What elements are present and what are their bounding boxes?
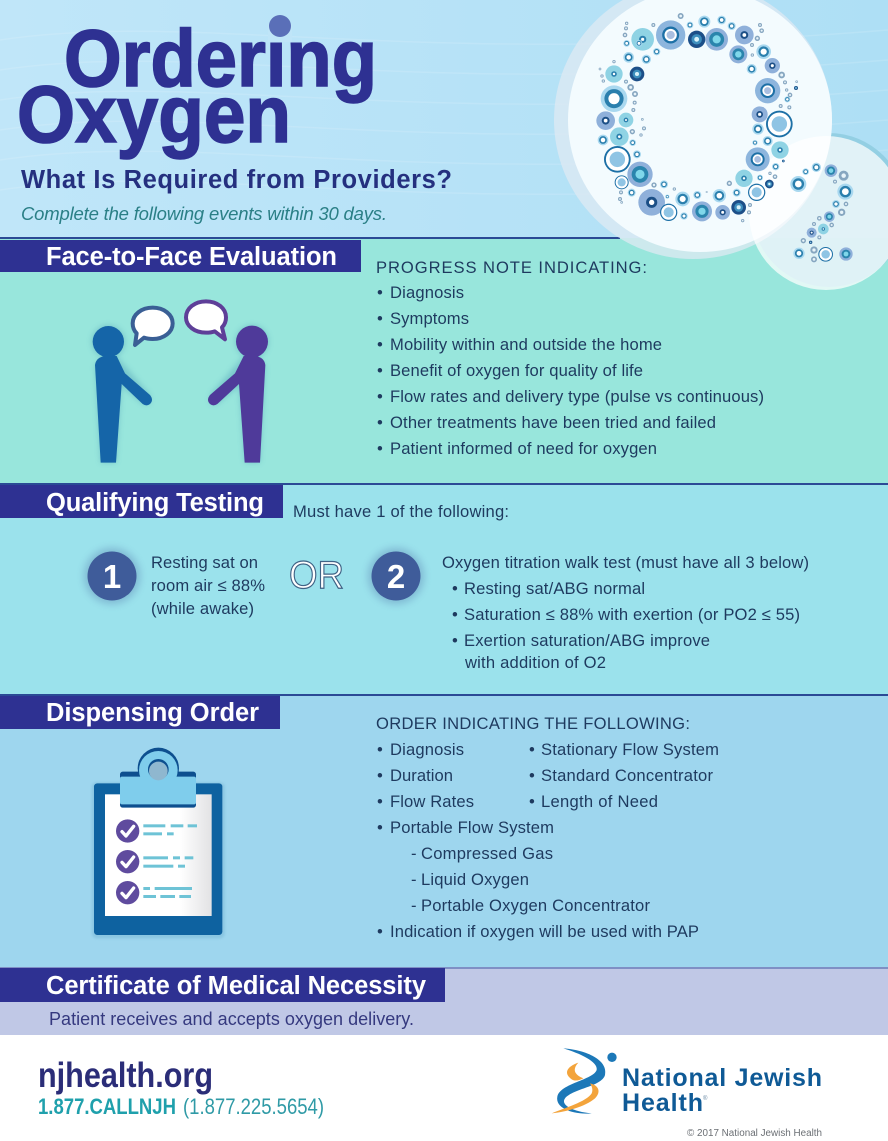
- option 1 text: room air ≤ 88%: [151, 576, 265, 595]
- option 2 text: •: [452, 579, 458, 598]
- footer: website and phone: (1.877.225.5654): [183, 1094, 324, 1119]
- text block: dispensing order list: Liquid Oxygen: [421, 870, 529, 889]
- text block: dispensing order list: -: [411, 844, 417, 863]
- graphic: O2 bubbles: [554, 0, 888, 290]
- option 2 text: Exertion saturation/ABG improve: [464, 631, 710, 650]
- option 1 badge: [84, 548, 140, 604]
- text block: progress note: Symptoms: [390, 309, 469, 328]
- option 2 text: Resting sat/ABG normal: [464, 579, 645, 598]
- option 2 text: Saturation ≤ 88% with exertion (or PO2 ≤ 55): [464, 605, 800, 624]
- title: Ordering: [64, 14, 377, 104]
- heading: certificate of medical necessity: Certificate of Medical Necessity: [46, 972, 427, 1000]
- intro text: Complete the following events within 30 days.: [21, 203, 387, 224]
- logo: National Jewish Health: ®: [703, 1095, 708, 1102]
- option 2 text: Oxygen titration walk test (must have all 3 below): [442, 553, 809, 572]
- text block: progress note: •: [377, 309, 383, 328]
- icon: clipboard: [92, 748, 225, 938]
- text block: dispensing order list: Flow Rates: [390, 792, 474, 811]
- option 2 text: •: [452, 605, 458, 624]
- text block: progress note: Diagnosis: [390, 283, 464, 302]
- text block: progress note: •: [377, 361, 383, 380]
- text block: dispensing order list: •: [377, 818, 383, 837]
- logo: National Jewish Health: [552, 1048, 822, 1117]
- text block: dispensing order list: Portable Flow System: [390, 818, 554, 837]
- text block: dispensing order list: •: [377, 740, 383, 759]
- heading: face-to-face evaluation: Face-to-Face Evaluation: [46, 243, 337, 271]
- title: Oxygen: [17, 70, 291, 160]
- text block: dispensing order list: ORDER INDICATING THE FOLLOWING:: [376, 714, 690, 733]
- text block: progress note: [376, 258, 764, 458]
- heading: qualifying testing: [0, 485, 283, 518]
- option 2 badge: 2: [387, 558, 405, 595]
- footer: website and phone: njhealth.org: [38, 1056, 213, 1095]
- text block: dispensing order list: Duration: [390, 766, 453, 785]
- text: patient receives: Patient receives and accepts oxygen delivery.: [49, 1009, 414, 1029]
- panel: qualifying testing: [0, 483, 888, 694]
- header background: [0, 0, 888, 240]
- text block: dispensing order list: -: [411, 870, 417, 889]
- text block: progress note: •: [377, 335, 383, 354]
- option 2 text: [442, 553, 809, 672]
- heading: qualifying testing: Qualifying Testing: [46, 489, 264, 517]
- text block: progress note: Flow rates and delivery type (pulse vs continuous): [390, 387, 764, 406]
- option 1 text: (while awake): [151, 599, 254, 618]
- heading: dispensing order: [0, 696, 280, 729]
- text block: progress note: Patient informed of need for oxygen: [390, 439, 657, 458]
- logo: National Jewish Health: Health: [622, 1089, 703, 1117]
- panel: dispensing order: [0, 694, 888, 968]
- text block: dispensing order list: Indication if oxygen will be used with PAP: [390, 922, 699, 941]
- icon: two people talking: [92, 301, 269, 463]
- label: OR: OR: [289, 554, 344, 597]
- text block: dispensing order list: Compressed Gas: [421, 844, 553, 863]
- text block: progress note: PROGRESS NOTE INDICATING:: [376, 258, 647, 277]
- text block: dispensing order list: [376, 714, 719, 941]
- text block: dispensing order list: •: [529, 740, 535, 759]
- text block: dispensing order list: Length of Need: [541, 792, 658, 811]
- heading: dispensing order: Dispensing Order: [46, 699, 259, 727]
- text block: dispensing order list: •: [529, 792, 535, 811]
- text block: dispensing order list: •: [377, 922, 383, 941]
- option 1 badge: 1: [103, 558, 121, 595]
- option 1 text: [151, 553, 265, 618]
- text block: progress note: Mobility within and outside the home: [390, 335, 662, 354]
- panel: certificate of medical necessity: [0, 967, 888, 1035]
- subtitle: What Is Required from Providers?: [21, 166, 452, 194]
- text block: progress note: •: [377, 283, 383, 302]
- option 2 text: with addition of O2: [464, 653, 606, 672]
- footer: website and phone: [38, 1056, 324, 1119]
- option 1 text: Resting sat on: [151, 553, 258, 572]
- text block: dispensing order list: •: [377, 766, 383, 785]
- title: [17, 14, 377, 160]
- panel: face-to-face evaluation: [0, 237, 888, 483]
- text block: progress note: Other treatments have been tried and failed: [390, 413, 716, 432]
- footer: website and phone: 1.877.CALLNJH: [38, 1094, 176, 1119]
- text block: dispensing order list: Portable Oxygen Concentrator: [421, 896, 650, 915]
- text block: dispensing order list: •: [529, 766, 535, 785]
- text block: progress note: •: [377, 387, 383, 406]
- text block: dispensing order list: -: [411, 896, 417, 915]
- text block: dispensing order list: •: [377, 792, 383, 811]
- text block: dispensing order list: Standard Concentrator: [541, 766, 713, 785]
- text block: progress note: •: [377, 439, 383, 458]
- text block: progress note: Benefit of oxygen for quality of life: [390, 361, 643, 380]
- option 2 badge: [368, 548, 424, 604]
- option 2 text: •: [452, 631, 458, 650]
- logo: National Jewish Health: National Jewish: [622, 1064, 822, 1092]
- text: must have one: Must have 1 of the following:: [293, 502, 509, 521]
- text block: progress note: •: [377, 413, 383, 432]
- copyright: © 2017 National Jewish Health: [687, 1128, 822, 1139]
- text block: dispensing order list: Diagnosis: [390, 740, 464, 759]
- text block: dispensing order list: Stationary Flow System: [541, 740, 719, 759]
